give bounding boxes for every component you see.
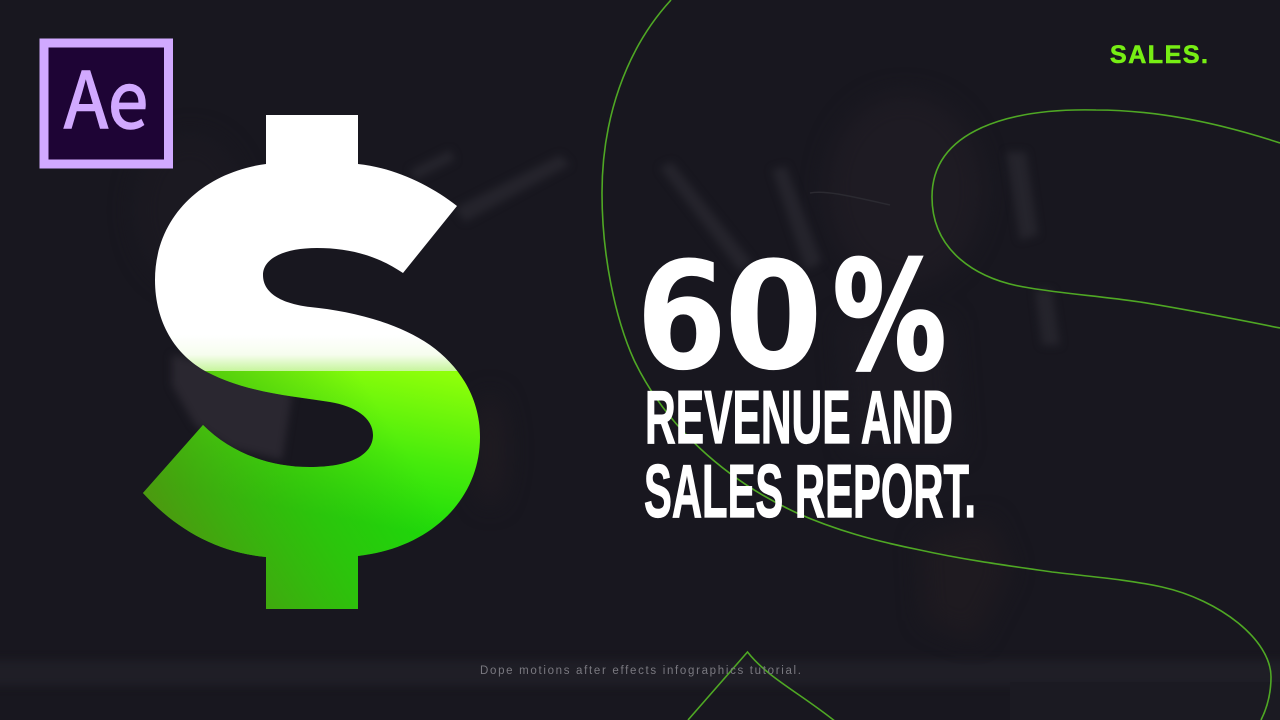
statistic: 60%: 0 bbox=[724, 231, 823, 404]
statistic: 60%: % bbox=[833, 231, 946, 404]
headline: revenue and sales report: SALES REPORT. bbox=[644, 449, 976, 533]
headline: revenue and sales report: REVENUE AND bbox=[645, 375, 953, 459]
icon: After Effects logo bbox=[44, 39, 168, 164]
decorative curve: bottom triangle peak bbox=[688, 652, 836, 720]
statistic: 60% bbox=[636, 231, 946, 404]
headline: revenue and sales report bbox=[644, 375, 976, 533]
icon: dollar sign filled to 60% bbox=[143, 115, 480, 609]
decorative curve: upper right loop bbox=[932, 110, 1280, 328]
footer caption: Dope motions after effects infographics tutorial. bbox=[480, 665, 801, 677]
decorative curve: large sweeping line bbox=[602, 0, 1271, 720]
heading: SALES. label: SALES. bbox=[1110, 41, 1208, 69]
icon: After Effects logo: Ae bbox=[64, 39, 148, 151]
statistic: 60%: 6 bbox=[636, 231, 727, 404]
